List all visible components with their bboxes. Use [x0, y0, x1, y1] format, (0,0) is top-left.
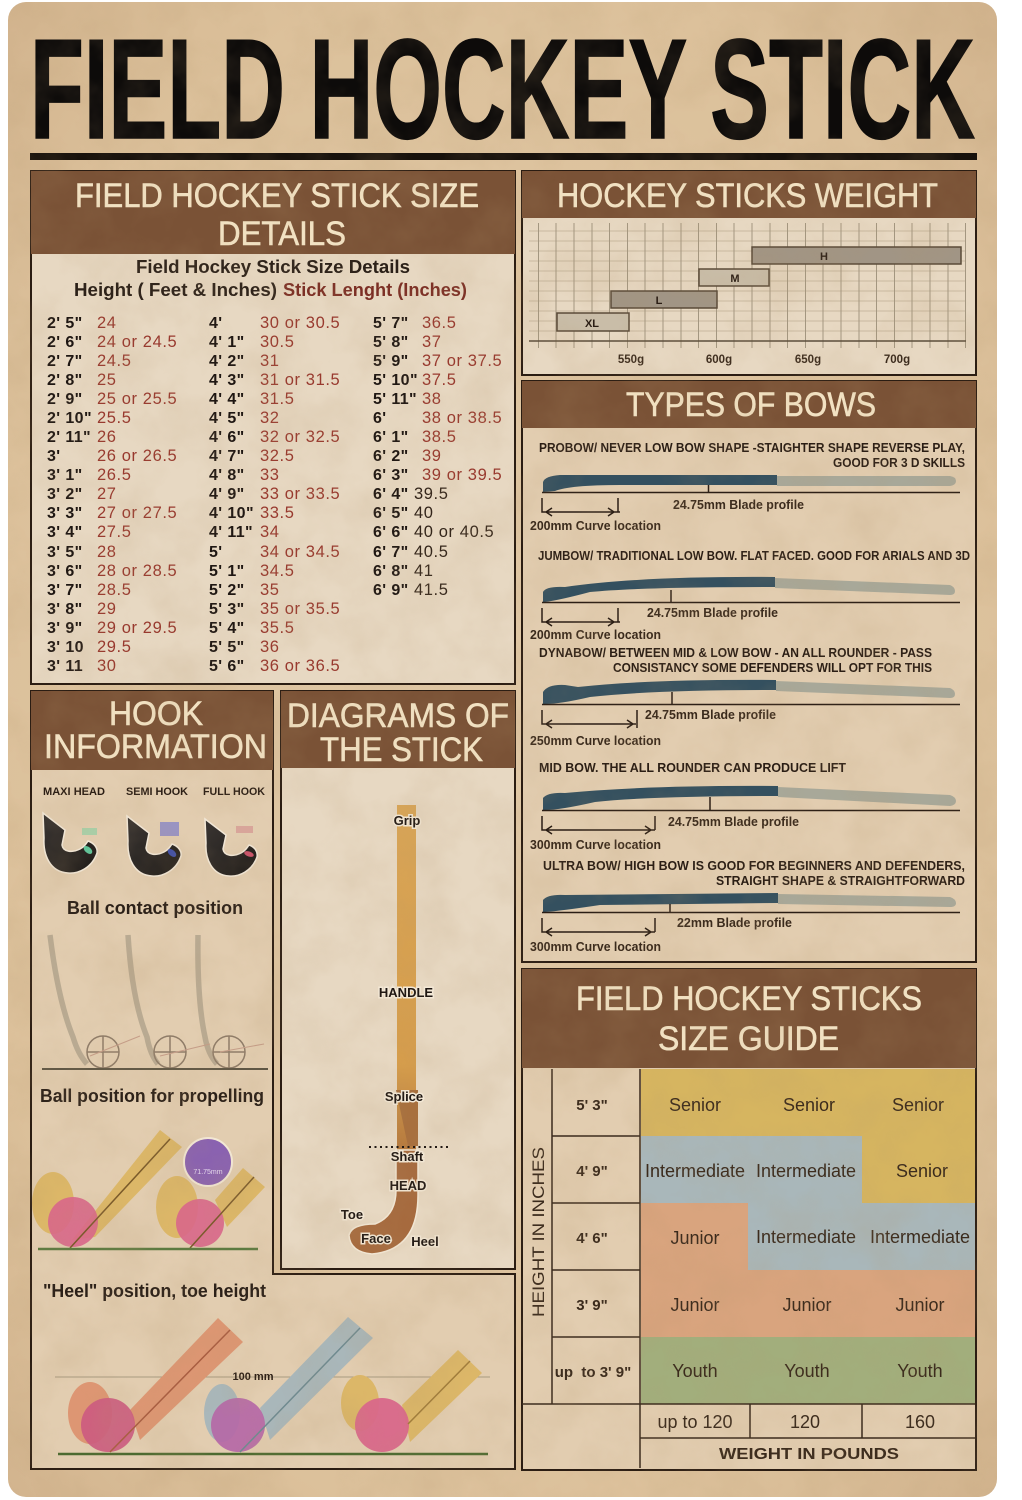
- size table column 3: [373, 314, 502, 599]
- size table column 3: 6' 2": [373, 448, 409, 465]
- panel header: [522, 969, 976, 1068]
- size table column 2: 5' 6": [209, 658, 245, 675]
- size table column 1: [47, 314, 177, 675]
- guide cell labels: Junior: [670, 1228, 720, 1248]
- guide cell labels: Youth: [897, 1361, 943, 1381]
- weight axis labels: 700g: [884, 354, 910, 366]
- height labels: 4' 9": [576, 1163, 608, 1180]
- size table column 3: 36.5: [422, 314, 457, 332]
- size table column 3: 5' 11": [373, 391, 417, 408]
- bow: dynabow: 24.75mm Blade profile: [645, 708, 776, 722]
- grey stick: [204, 1317, 373, 1452]
- panel header: [522, 381, 976, 428]
- size table column 2: 30.5: [260, 333, 295, 351]
- stick part labels: HANDLE: [379, 985, 433, 1000]
- guide cell labels: Intermediate: [645, 1161, 745, 1181]
- size table column 1: 28: [97, 543, 117, 561]
- stick part labels: Toe: [341, 1207, 363, 1222]
- size table column 2: [209, 314, 340, 675]
- bow: jumbow: 200mm Curve location: [530, 628, 661, 642]
- panel header: HOOK: [109, 695, 203, 733]
- size table column 3: 5' 10": [373, 372, 418, 389]
- size table column 3: 40: [414, 504, 434, 522]
- size table column 3: 41: [414, 562, 434, 580]
- bar XL: [557, 313, 629, 331]
- heel position diagram: [55, 1317, 490, 1454]
- size table column 1: 2' 10": [47, 410, 92, 427]
- bow: probow: [530, 441, 965, 533]
- size table column 2: 4' 10": [209, 505, 254, 522]
- height labels: [555, 1097, 631, 1381]
- size table column 2: 33 or 33.5: [260, 485, 340, 503]
- size table column 2: 35.5: [260, 619, 295, 637]
- size table column 3: 37.5: [422, 371, 457, 389]
- size table column 3: 37: [422, 333, 442, 351]
- guide cell labels: [645, 1095, 970, 1381]
- icon: semi hook: [127, 816, 181, 876]
- size table column 1: 3' 9": [47, 620, 83, 637]
- size table column 1: 2' 9": [47, 391, 83, 408]
- size table column 2: 4': [209, 315, 223, 332]
- yellow stick: [341, 1350, 482, 1452]
- size table column 1: 26: [97, 428, 117, 446]
- size table column 1: 3' 4": [47, 524, 83, 541]
- size table column 1: 24: [97, 314, 117, 332]
- stick part labels: Grip: [394, 813, 420, 828]
- size table column 2: 32.5: [260, 447, 295, 465]
- guide cell labels: Youth: [784, 1361, 830, 1381]
- table heading: Height ( Feet & Inches): [74, 280, 277, 300]
- panel header: [31, 691, 273, 770]
- bow: ultra bow: STRAIGHT SHAPE & STRAIGHTFORWARD: [716, 874, 965, 888]
- bow: jumbow: 24.75mm Blade profile: [647, 606, 778, 620]
- guide cell labels: Junior: [782, 1295, 832, 1315]
- size table column 1: 27 or 27.5: [97, 504, 177, 522]
- size table column 3: 40.5: [414, 543, 449, 561]
- size table column 2: 32 or 32.5: [260, 428, 340, 446]
- weight labels: [657, 1412, 935, 1463]
- panel header: [281, 691, 515, 769]
- size table column 1: 2' 11": [47, 429, 91, 446]
- size table column 2: 4' 9": [209, 486, 245, 503]
- heel position diagram: 100 mm: [233, 1371, 274, 1383]
- size table column 3: 38: [422, 390, 442, 408]
- size table column 2: 4' 6": [209, 429, 245, 446]
- colour grid: [522, 1069, 975, 1468]
- bar H: H: [820, 251, 828, 263]
- axis label: height: HEIGHT IN INCHES: [529, 1147, 548, 1317]
- size table column 1: 2' 7": [47, 353, 83, 370]
- stick part labels: HEAD: [390, 1178, 426, 1193]
- bow: mid bow: MID BOW. THE ALL ROUNDER CAN PRODUCE LIFT: [539, 761, 846, 775]
- size table column 3: 6' 1": [373, 429, 409, 446]
- bow: probow: 24.75mm Blade profile: [673, 498, 804, 512]
- size table column 2: 4' 5": [209, 410, 245, 427]
- stick part labels: [341, 813, 439, 1249]
- size table column 2: 34: [260, 523, 280, 541]
- orange stick: [68, 1318, 243, 1452]
- panel header: TYPES OF BOWS: [626, 386, 876, 424]
- size table column 2: 36: [260, 638, 280, 656]
- size table column 3: 6' 7": [373, 544, 409, 561]
- size table column 2: 4' 2": [209, 353, 245, 370]
- panel: hockey sticks weight: [522, 171, 976, 375]
- table heading: [74, 257, 467, 300]
- hook types: FULL HOOK: [203, 786, 265, 798]
- size table column 2: 4' 7": [209, 448, 245, 465]
- propelling diagram: [32, 1130, 265, 1249]
- panel: hook information: [31, 691, 515, 1469]
- bow: probow: GOOD FOR 3 D SKILLS: [833, 456, 965, 470]
- size table column 2: 33.5: [260, 504, 295, 522]
- panel: stick size details: [31, 171, 515, 684]
- size table column 1: 3' 8": [47, 601, 83, 618]
- size table column 3: 40 or 40.5: [414, 523, 494, 541]
- size table column 2: 5' 4": [209, 620, 245, 637]
- heading: ball position for propelling: Ball position for propelling: [40, 1086, 264, 1106]
- size table column 3: 38.5: [422, 428, 457, 446]
- size table column 1: 29: [97, 600, 117, 618]
- bar M: M: [730, 273, 740, 285]
- panel header: HOCKEY STICKS WEIGHT: [557, 177, 938, 215]
- panel: diagrams of the stick: [281, 691, 515, 1269]
- weight labels: WEIGHT IN POUNDS: [719, 1446, 899, 1463]
- size table column 2: 32: [260, 409, 280, 427]
- guide cell labels: Intermediate: [870, 1227, 970, 1247]
- size table column 2: 5': [209, 544, 223, 561]
- size table column 1: 2' 6": [47, 334, 83, 351]
- size table column 3: 5' 8": [373, 334, 409, 351]
- size table column 1: 3' 10: [47, 639, 84, 656]
- size table column 1: 3' 11: [47, 658, 83, 675]
- size table column 2: 4' 8": [209, 467, 245, 484]
- panel header: DETAILS: [218, 215, 346, 253]
- size table column 2: 5' 1": [209, 563, 245, 580]
- bar XL: XL: [585, 318, 599, 330]
- size table column 2: 4' 1": [209, 334, 245, 351]
- bow: dynabow: 250mm Curve location: [530, 734, 661, 748]
- guide cell labels: Senior: [896, 1161, 948, 1181]
- size table column 1: 2' 5": [47, 315, 83, 332]
- hook types: [43, 786, 265, 876]
- panel header: THE STICK: [320, 731, 483, 769]
- weight axis labels: 600g: [706, 354, 732, 366]
- size table column 2: 33: [260, 466, 280, 484]
- size table column 1: 27.5: [97, 523, 132, 541]
- height labels: 3' 9": [576, 1297, 608, 1314]
- size table column 1: 3': [47, 448, 61, 465]
- heading: ball contact position: Ball contact position: [67, 898, 243, 918]
- weight labels: 160: [905, 1412, 935, 1432]
- size table column 3: 39: [422, 447, 442, 465]
- size table column 3: 6' 6": [373, 524, 409, 541]
- bar M: [699, 269, 769, 286]
- size table column 2: 34 or 34.5: [260, 543, 340, 561]
- size table column 3: 6' 3": [373, 467, 409, 484]
- height labels: 4' 6": [576, 1230, 608, 1247]
- bow: mid bow: 24.75mm Blade profile: [668, 815, 799, 829]
- size table column 3: 38 or 38.5: [422, 409, 502, 427]
- panel header: SIZE GUIDE: [658, 1020, 839, 1058]
- bow: probow: PROBOW/ NEVER LOW BOW SHAPE -STAIGHTER SHAPE REVERSE PLAY,: [539, 441, 965, 455]
- size table column 3: 6' 9": [373, 582, 409, 599]
- size table column 1: 3' 1": [47, 467, 83, 484]
- ball contact diagram: [42, 935, 268, 1069]
- size table column 2: 4' 3": [209, 372, 245, 389]
- bar L: L: [656, 295, 663, 307]
- bar L: [611, 291, 717, 308]
- hook types: SEMI HOOK: [126, 786, 188, 798]
- guide cell labels: Junior: [895, 1295, 945, 1315]
- icon: maxi head: [43, 813, 97, 873]
- size table column 1: 25: [97, 371, 117, 389]
- bow: dynabow: [530, 646, 960, 748]
- size table column 2: 4' 11": [209, 524, 253, 541]
- title rule: [30, 153, 977, 160]
- bow: jumbow: [530, 549, 970, 642]
- size table column 1: 24.5: [97, 352, 132, 370]
- stick part labels: Shaft: [391, 1149, 424, 1164]
- guide cell labels: Intermediate: [756, 1161, 856, 1181]
- bow: ultra bow: 22mm Blade profile: [677, 916, 792, 930]
- weight labels: up to 120: [657, 1412, 733, 1432]
- size table column 3: 6' 8": [373, 563, 409, 580]
- size table column 3: 6' 5": [373, 505, 409, 522]
- stick diagram: [341, 805, 448, 1254]
- guide cell labels: Senior: [783, 1095, 835, 1115]
- panel header: DIAGRAMS OF: [287, 697, 509, 735]
- size table column 2: 35 or 35.5: [260, 600, 340, 618]
- bow: dynabow: CONSISTANCY SOME DEFENDERS WILL OPT FOR THIS: [613, 661, 932, 675]
- size table column 1: 28 or 28.5: [97, 562, 177, 580]
- size table column 1: 2' 8": [47, 372, 83, 389]
- weight axis labels: 550g: [618, 354, 644, 366]
- bow: ultra bow: [530, 859, 965, 954]
- size table column 1: 3' 3": [47, 505, 83, 522]
- weight axis labels: [618, 354, 910, 366]
- bow: dynabow: DYNABOW/ BETWEEN MID & LOW BOW - AN ALL ROUNDER - PASS: [539, 646, 932, 660]
- size table column 2: 5' 5": [209, 639, 245, 656]
- size table column 1: 29 or 29.5: [97, 619, 177, 637]
- size table column 2: 5' 3": [209, 601, 245, 618]
- weight axis labels: 650g: [795, 354, 821, 366]
- size table column 3: 39 or 39.5: [422, 466, 502, 484]
- guide cell labels: Intermediate: [756, 1227, 856, 1247]
- size table column 3: 6' 4": [373, 486, 409, 503]
- guide cell labels: Senior: [669, 1095, 721, 1115]
- table heading: Stick Lenght (Inches): [283, 280, 467, 300]
- stick part labels: Splice: [385, 1089, 423, 1104]
- size table column 1: 25.5: [97, 409, 132, 427]
- size table column 3: 5' 9": [373, 353, 409, 370]
- size table column 1: 24 or 24.5: [97, 333, 177, 351]
- panel header: FIELD HOCKEY STICK SIZE: [75, 177, 479, 215]
- size table column 1: 30: [97, 657, 117, 675]
- size table column 1: 3' 2": [47, 486, 83, 503]
- weight labels: 120: [790, 1412, 820, 1432]
- size table column 2: 4' 4": [209, 391, 245, 408]
- panel header: [31, 171, 515, 254]
- size table column 1: 25 or 25.5: [97, 390, 177, 408]
- panel header: FIELD HOCKEY STICKS: [576, 980, 922, 1018]
- bow: mid bow: [530, 761, 960, 852]
- size table column 3: 37 or 37.5: [422, 352, 502, 370]
- size table column 2: 30 or 30.5: [260, 314, 340, 332]
- size table column 2: 34.5: [260, 562, 295, 580]
- size table column 1: 28.5: [97, 581, 132, 599]
- stick part labels: Heel: [411, 1234, 439, 1249]
- size table column 1: 27: [97, 485, 117, 503]
- heading: heel position: "Heel" position, toe height: [43, 1281, 266, 1301]
- size table column 2: 31 or 31.5: [260, 371, 340, 389]
- guide cell labels: Junior: [670, 1295, 720, 1315]
- size table column 2: 36 or 36.5: [260, 657, 340, 675]
- stick part labels: Face: [361, 1231, 391, 1246]
- size table column 2: 5' 2": [209, 582, 245, 599]
- size table column 2: 31.5: [260, 390, 295, 408]
- guide cell labels: Youth: [672, 1361, 718, 1381]
- height labels: up to 3' 9": [555, 1364, 631, 1381]
- bow: probow: 200mm Curve location: [530, 519, 661, 533]
- size table column 3: 5' 7": [373, 315, 409, 332]
- bow: jumbow: JUMBOW/ TRADITIONAL LOW BOW. FLAT FACED. GOOD FOR ARIALS AND 3D: [538, 549, 970, 563]
- icon: full hook: [205, 819, 257, 876]
- panel: types of bows: [522, 381, 976, 962]
- size table column 1: 3' 7": [47, 582, 83, 599]
- table heading: Field Hockey Stick Size Details: [136, 257, 410, 277]
- bow: ultra bow: 300mm Curve location: [530, 940, 661, 954]
- size table column 1: 29.5: [97, 638, 132, 656]
- size table column 1: 26 or 26.5: [97, 447, 177, 465]
- size table column 1: 26.5: [97, 466, 132, 484]
- size table column 2: 35: [260, 581, 280, 599]
- guide cell labels: Senior: [892, 1095, 944, 1115]
- panel: size guide: [522, 969, 976, 1470]
- propelling diagram: 71.75mm: [193, 1169, 223, 1176]
- bar H: [752, 247, 961, 264]
- weight chart: [529, 223, 966, 366]
- size table column 2: 31: [260, 352, 280, 370]
- hook types: MAXI HEAD: [43, 786, 105, 798]
- bow: mid bow: 300mm Curve location: [530, 838, 661, 852]
- bow: ultra bow: ULTRA BOW/ HIGH BOW IS GOOD FOR BEGINNERS AND DEFENDERS,: [543, 859, 965, 873]
- size table column 3: 41.5: [414, 581, 449, 599]
- size table column 1: 3' 5": [47, 544, 83, 561]
- size table column 3: 39.5: [414, 485, 449, 503]
- height labels: 5' 3": [576, 1097, 608, 1114]
- panel header: INFORMATION: [44, 728, 267, 766]
- size table column 1: 3' 6": [47, 563, 83, 580]
- size table column 3: 6': [373, 410, 387, 427]
